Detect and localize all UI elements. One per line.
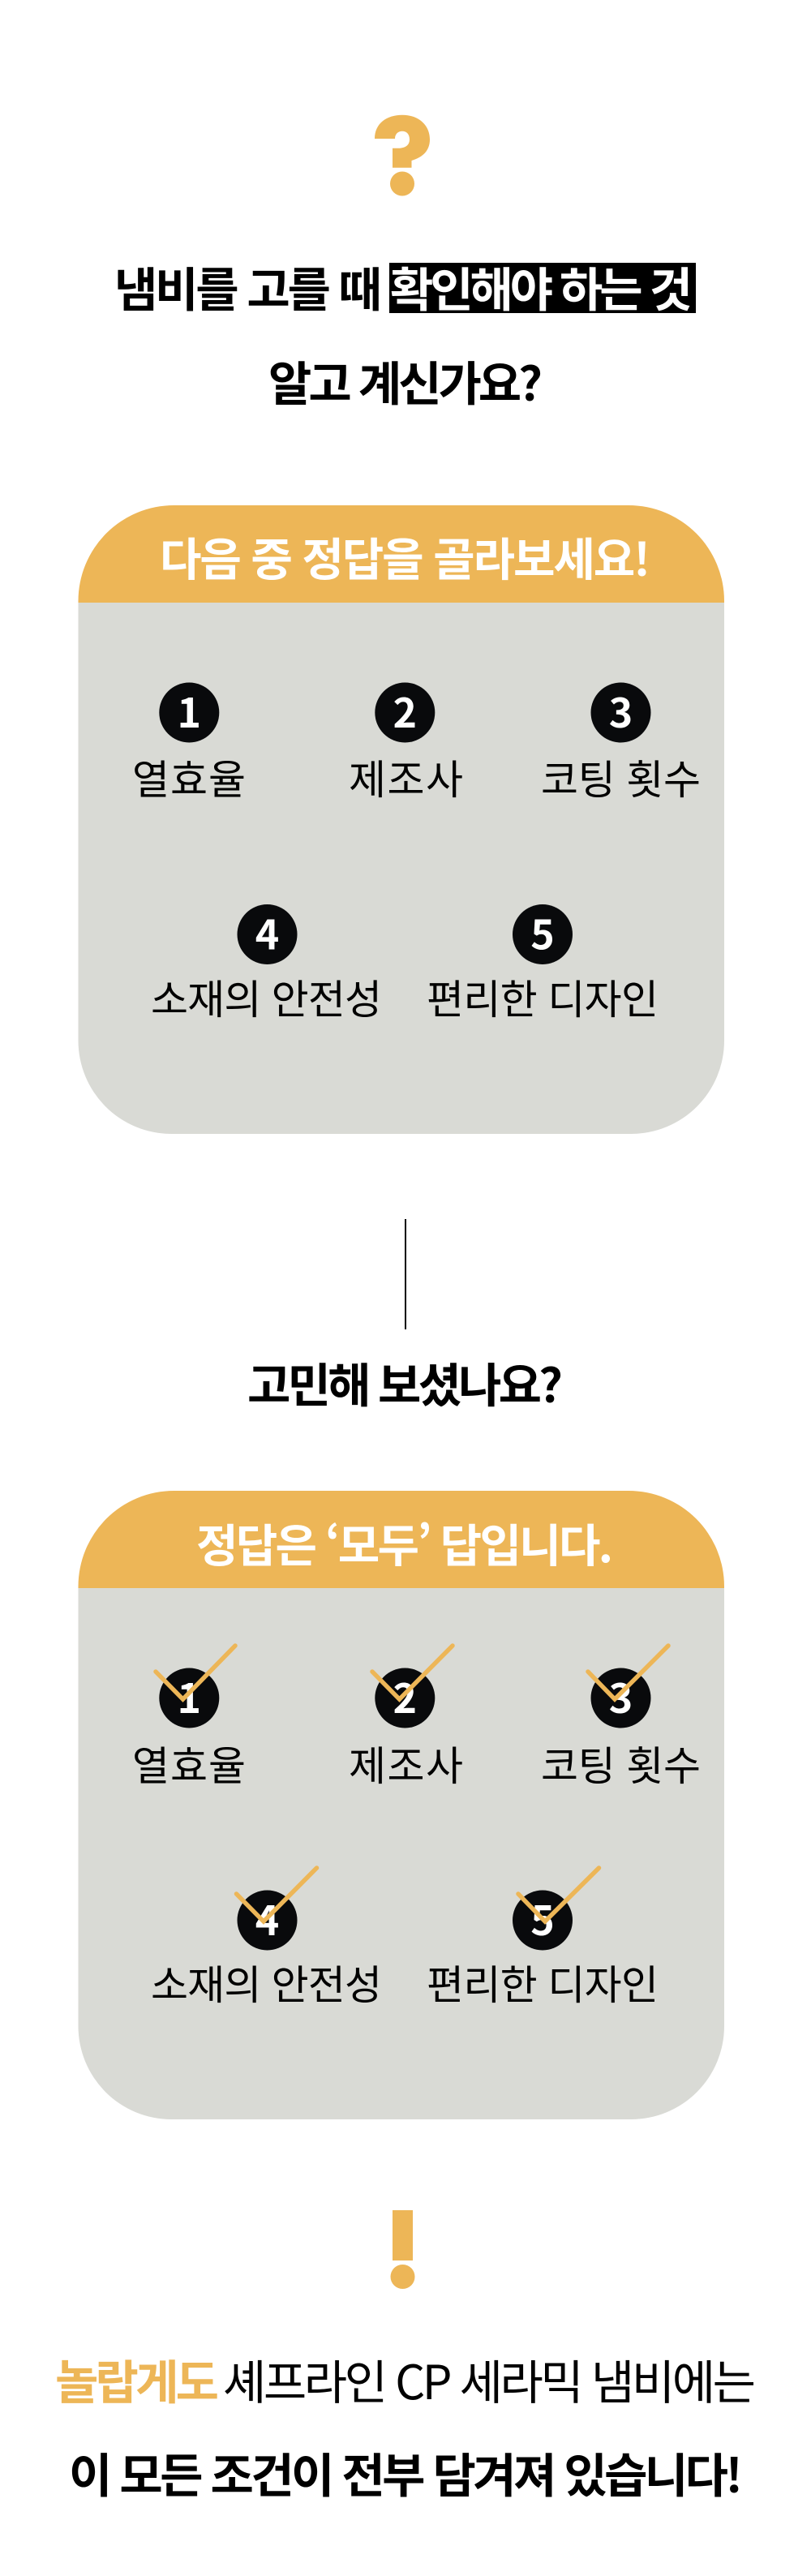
option 2 (349, 681, 463, 806)
heading line 1 left: 냄비를 고를 때 (114, 252, 382, 320)
option 1 checked: 열효율 (132, 1734, 246, 1792)
option 4 checked (151, 1868, 382, 2011)
option 3: 3 (609, 681, 633, 740)
icon: exclamation mark (391, 2210, 415, 2289)
closing text (55, 2345, 756, 2506)
option 3 (541, 681, 701, 806)
option 1 checked (132, 1646, 246, 1792)
heading line 1 highlighted: 확인해야 하는 것 (390, 252, 693, 320)
option 2 checked: 2 (393, 1667, 417, 1725)
option 1: 1 (178, 681, 201, 740)
closing line 2: 이 모든 조건이 전부 담겨져 있습니다! (69, 2438, 743, 2506)
option 4 checked: 소재의 안전성 (151, 1953, 382, 2011)
panel header text: 다음 중 정답을 골라보세요! (160, 524, 650, 590)
option 1 (132, 681, 246, 806)
option 5 checked (427, 1868, 659, 2011)
option 5: 5 (530, 904, 555, 962)
panel background (78, 603, 724, 1134)
icon: question mark (375, 115, 430, 196)
panel header band (78, 1491, 724, 1588)
option 1: 열효율 (132, 748, 246, 806)
option 3 checked (541, 1646, 701, 1792)
option 5 checked: 5 (530, 1889, 555, 1947)
panel header band (78, 505, 724, 603)
option 4 (151, 904, 382, 1026)
panel: answer is all (78, 1491, 724, 2119)
option 2: 제조사 (349, 748, 463, 806)
option 3 checked: 3 (609, 1667, 633, 1725)
option 3 checked: 코팅 횟수 (541, 1734, 701, 1792)
panel: choose the answer (78, 505, 724, 1134)
heading: have you thought: 고민해 보셨나요? (247, 1348, 563, 1416)
panel background (78, 1588, 724, 2119)
option 5: 편리한 디자인 (427, 968, 659, 1026)
heading: intro question (114, 252, 696, 414)
closing line 1: 셰프라인 CP 세라믹 냄비에는 (223, 2345, 756, 2413)
heading line 2: 알고 계신가요? (268, 346, 543, 414)
option 4: 4 (255, 904, 279, 962)
closing emphasis word: 놀랍게도 (55, 2345, 219, 2413)
option 4 checked: 4 (255, 1889, 279, 1947)
option 5 checked: 편리한 디자인 (427, 1953, 659, 2011)
option 2 checked (349, 1646, 463, 1792)
option 1 checked: 1 (178, 1667, 201, 1725)
option 5 (427, 904, 659, 1026)
highlight: black box behind text (389, 263, 696, 313)
connector line (405, 1219, 406, 1329)
option 2: 2 (393, 681, 417, 740)
option 4: 소재의 안전성 (151, 968, 382, 1026)
option 3: 코팅 횟수 (541, 748, 701, 806)
panel header text: 정답은 ‘모두’ 답입니다. (196, 1510, 613, 1576)
option 2 checked: 제조사 (349, 1734, 463, 1792)
